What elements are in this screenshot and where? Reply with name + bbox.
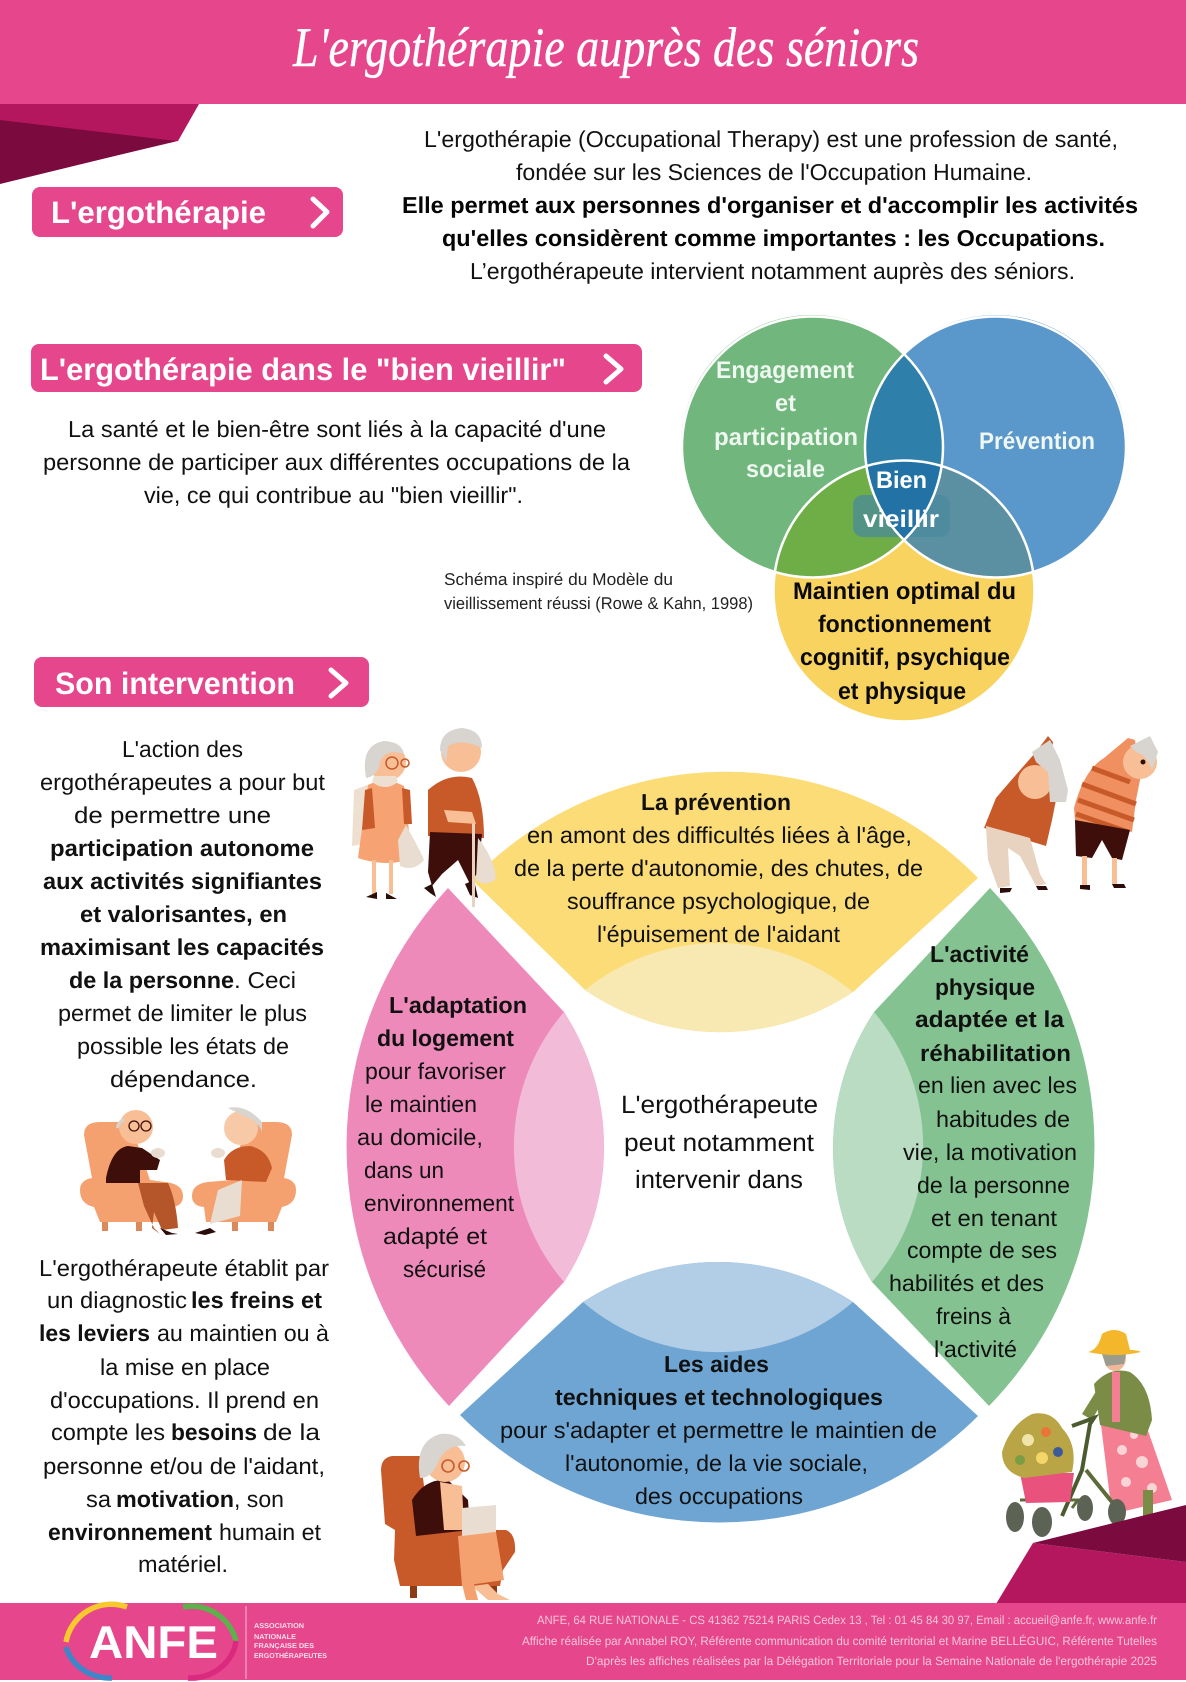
prévention text: en amont des difficultés liées à l'âge, xyxy=(527,822,912,848)
left text: diagnostic: les leviers xyxy=(39,1320,150,1346)
activité text xyxy=(889,941,1077,1362)
left text: diagnostic: la mise en place xyxy=(100,1354,270,1380)
aides text: des occupations xyxy=(635,1483,803,1509)
aides text: techniques et technologiques xyxy=(555,1384,883,1410)
venn label: engagement: et xyxy=(775,390,796,417)
left text: diagnostic: matériel. xyxy=(138,1551,228,1577)
activité text: freins à xyxy=(936,1303,1011,1329)
intro text block: L’ergothérapeute intervient notamment auprès des séniors. xyxy=(470,258,1075,284)
intro text block: L'ergothérapie (Occupational Therapy) est une profession de santé, xyxy=(424,126,1118,152)
left text: diagnostic: de la xyxy=(263,1419,320,1445)
button: bien vieillir: L'ergothérapie dans le "bien vieillir" xyxy=(40,352,566,387)
left text: action des ergothérapeutes xyxy=(40,736,326,1092)
activité text: L'activité xyxy=(930,941,1029,967)
intro text block: Elle permet aux personnes d'organiser et d'accomplir les activités xyxy=(402,192,1138,218)
left text: action des ergothérapeutes: de permettre une xyxy=(74,802,271,828)
intro text block: fondée sur les Sciences de l'Occupation Humaine. xyxy=(516,159,1032,185)
activité text: adaptée et la xyxy=(915,1006,1064,1032)
footer credits xyxy=(522,1613,1157,1668)
adaptation text: le maintien xyxy=(365,1091,477,1117)
woman xyxy=(352,741,424,899)
left text: diagnostic xyxy=(39,1255,329,1577)
activité text: vie, la motivation xyxy=(903,1139,1077,1165)
adaptation text: sécurisé xyxy=(403,1256,486,1282)
prévention text: l'épuisement de l'aidant xyxy=(597,921,841,947)
venn label: engagement: sociale xyxy=(746,456,825,483)
paragraph: bien vieillir: La santé et le bien-être sont liés à la capacité d'une xyxy=(68,416,606,442)
venn label: maintien: et physique xyxy=(838,678,966,705)
activité text: en lien avec les xyxy=(918,1072,1077,1098)
venn label: engagement: participation xyxy=(714,424,858,451)
venn label: maintien: cognitif, psychique xyxy=(800,644,1010,671)
left text: action des ergothérapeutes: ergothérapeutes a pour but xyxy=(40,769,326,795)
paragraph: bien vieillir xyxy=(43,416,630,508)
man xyxy=(1074,736,1158,890)
button: L'ergothérapie: L'ergothérapie xyxy=(51,195,266,230)
logo ANFE: ANFE xyxy=(89,1616,218,1668)
left text: action des ergothérapeutes: de la personne xyxy=(69,967,234,993)
venn diagram xyxy=(681,315,1127,722)
adaptation text: environnement xyxy=(364,1190,515,1216)
footer credits: Affiche réalisée par Annabel ROY, Référente communication du comité territorial et Marine BELLÉGUIC, Référente Tutelles xyxy=(522,1634,1157,1648)
left text: action des ergothérapeutes: possible les états de xyxy=(77,1033,289,1059)
illustration: woman with walker and flowers xyxy=(1002,1330,1172,1537)
left text: action des ergothérapeutes: dépendance. xyxy=(110,1066,257,1092)
activité text: habitudes de xyxy=(936,1106,1070,1132)
paragraph: bien vieillir: personne de participer aux différentes occupations de la xyxy=(43,449,630,475)
left text: diagnostic: L'ergothérapeute établit par xyxy=(39,1255,329,1281)
petal: aides techniques xyxy=(460,1262,978,1522)
caption: schema source: vieillissement réussi (Rowe & Kahn, 1998) xyxy=(444,594,753,613)
venn label: bien vieillir: vieillir xyxy=(863,506,939,533)
venn label: engagement: Engagement xyxy=(716,357,854,384)
association name: ASSOCIATION xyxy=(254,1623,304,1630)
left text: diagnostic: un diagnostic xyxy=(47,1287,187,1313)
title: L'ergothérapie auprès des séniors xyxy=(292,17,919,79)
prévention text: de la perte d'autonomie, des chutes, de xyxy=(514,855,923,881)
aides text: pour s'adapter et permettre le maintien de xyxy=(500,1417,937,1443)
paragraph: bien vieillir: vie, ce qui contribue au "bien vieillir". xyxy=(144,482,523,508)
activité text: l'activité xyxy=(934,1336,1017,1362)
decorative corner top-left xyxy=(0,104,199,184)
right armchair xyxy=(192,1107,296,1235)
center text xyxy=(621,1091,818,1194)
woman xyxy=(984,736,1068,893)
logo ANFE xyxy=(66,1604,236,1678)
left text: diagnostic: au maintien ou à xyxy=(157,1320,329,1346)
footer credits: D'après les affiches réalisées par la Délégation Territoriale pour la Semaine Nationale de l'ergothérapie 2025 xyxy=(586,1654,1157,1668)
left text: diagnostic: d'occupations. Il prend en xyxy=(50,1387,319,1413)
activité text: physique xyxy=(935,974,1035,1000)
left text: diagnostic: besoins xyxy=(171,1419,257,1445)
left text: action des ergothérapeutes: . Ceci xyxy=(234,967,296,993)
man xyxy=(424,728,496,907)
intro text block xyxy=(402,126,1138,284)
venn label: maintien xyxy=(793,578,1016,705)
left text: action des ergothérapeutes: participation autonome xyxy=(50,835,314,861)
decorative corner bottom-right xyxy=(996,1505,1186,1604)
adaptation text: pour favoriser xyxy=(365,1058,506,1084)
adaptation text: adapté et xyxy=(383,1223,488,1249)
venn label: engagement xyxy=(714,357,858,483)
prévention text xyxy=(514,789,923,947)
illustration: woman in armchair with laptop xyxy=(381,1434,515,1600)
prévention text: La prévention xyxy=(641,789,791,815)
venn label: maintien: fonctionnement xyxy=(818,611,991,638)
activité text: et en tenant xyxy=(931,1205,1058,1231)
footer credits: ANFE, 64 RUE NATIONALE - CS 41362 75214 PARIS Cedex 13 , Tel : 01 45 84 30 97, Email : accueil@anfe.fr, www.anfe.fr xyxy=(537,1613,1157,1627)
button: son intervention: Son intervention xyxy=(55,666,295,701)
left text: diagnostic: motivation xyxy=(116,1486,234,1512)
venn label: maintien: Maintien optimal du xyxy=(793,578,1016,605)
left text: diagnostic: , son xyxy=(234,1486,284,1512)
left text: action des ergothérapeutes: aux activités signifiantes xyxy=(43,868,322,894)
intro text block: qu'elles considèrent comme importantes : les Occupations. xyxy=(442,225,1105,251)
left armchair xyxy=(80,1110,183,1235)
activité text: réhabilitation xyxy=(920,1040,1071,1066)
left text: diagnostic: sa xyxy=(86,1486,111,1512)
aides text: Les aides xyxy=(664,1351,769,1377)
header band with title xyxy=(0,0,1186,104)
adaptation text: L'adaptation xyxy=(389,992,527,1018)
association name xyxy=(254,1623,327,1660)
petal: adaptation du logement xyxy=(347,888,604,1406)
association name: ERGOTHÉRAPEUTES xyxy=(254,1651,327,1660)
adaptation text: au domicile, xyxy=(357,1124,483,1150)
aides text xyxy=(500,1351,937,1509)
left text: diagnostic: les freins et xyxy=(191,1287,322,1313)
petal: la prévention xyxy=(472,772,978,1032)
left text: action des ergothérapeutes: maximisant les capacités xyxy=(40,934,324,960)
illustration: couple walking xyxy=(352,728,496,907)
left text: action des ergothérapeutes: L'action des xyxy=(122,736,243,762)
center text: intervenir dans xyxy=(635,1166,803,1194)
button: L'ergothérapie xyxy=(32,187,343,237)
adaptation text: du logement xyxy=(377,1025,514,1051)
left text: action des ergothérapeutes: et valorisantes, en xyxy=(80,901,287,927)
caption: schema source: Schéma inspiré du Modèle du xyxy=(444,570,673,589)
venn label: prevention: Prévention xyxy=(979,428,1095,455)
caption: schema source xyxy=(444,570,753,613)
button: son intervention xyxy=(34,657,369,707)
venn label: bien vieillir xyxy=(863,467,939,533)
adaptation text xyxy=(357,992,527,1282)
prévention text: souffrance psychologique, de xyxy=(567,888,870,914)
left text: diagnostic: humain et xyxy=(219,1519,322,1545)
illustration: couple in armchairs xyxy=(80,1107,296,1235)
center text: L'ergothérapeute xyxy=(621,1091,818,1119)
venn label: bien vieillir: Bien xyxy=(876,467,927,494)
button: bien vieillir xyxy=(31,344,642,392)
illustration: couple stretching xyxy=(984,736,1158,893)
aides text: l'autonomie, de la vie sociale, xyxy=(565,1450,868,1476)
association name: NATIONALE xyxy=(254,1634,296,1641)
left text: diagnostic: personne et/ou de l'aidant, xyxy=(43,1453,325,1479)
left text: action des ergothérapeutes: permet de limiter le plus xyxy=(58,1000,307,1026)
left text: diagnostic: compte les xyxy=(51,1419,165,1445)
left text: diagnostic: environnement xyxy=(48,1519,212,1545)
center text: peut notamment xyxy=(624,1129,814,1157)
adaptation text: dans un xyxy=(364,1157,444,1183)
activité text: habilités et des xyxy=(889,1270,1044,1296)
association name: FRANÇAISE DES xyxy=(254,1643,314,1650)
activité text: compte de ses xyxy=(907,1237,1057,1263)
footer band xyxy=(0,1603,1186,1680)
petal: activité physique xyxy=(833,888,1094,1406)
activité text: de la personne xyxy=(917,1172,1070,1198)
